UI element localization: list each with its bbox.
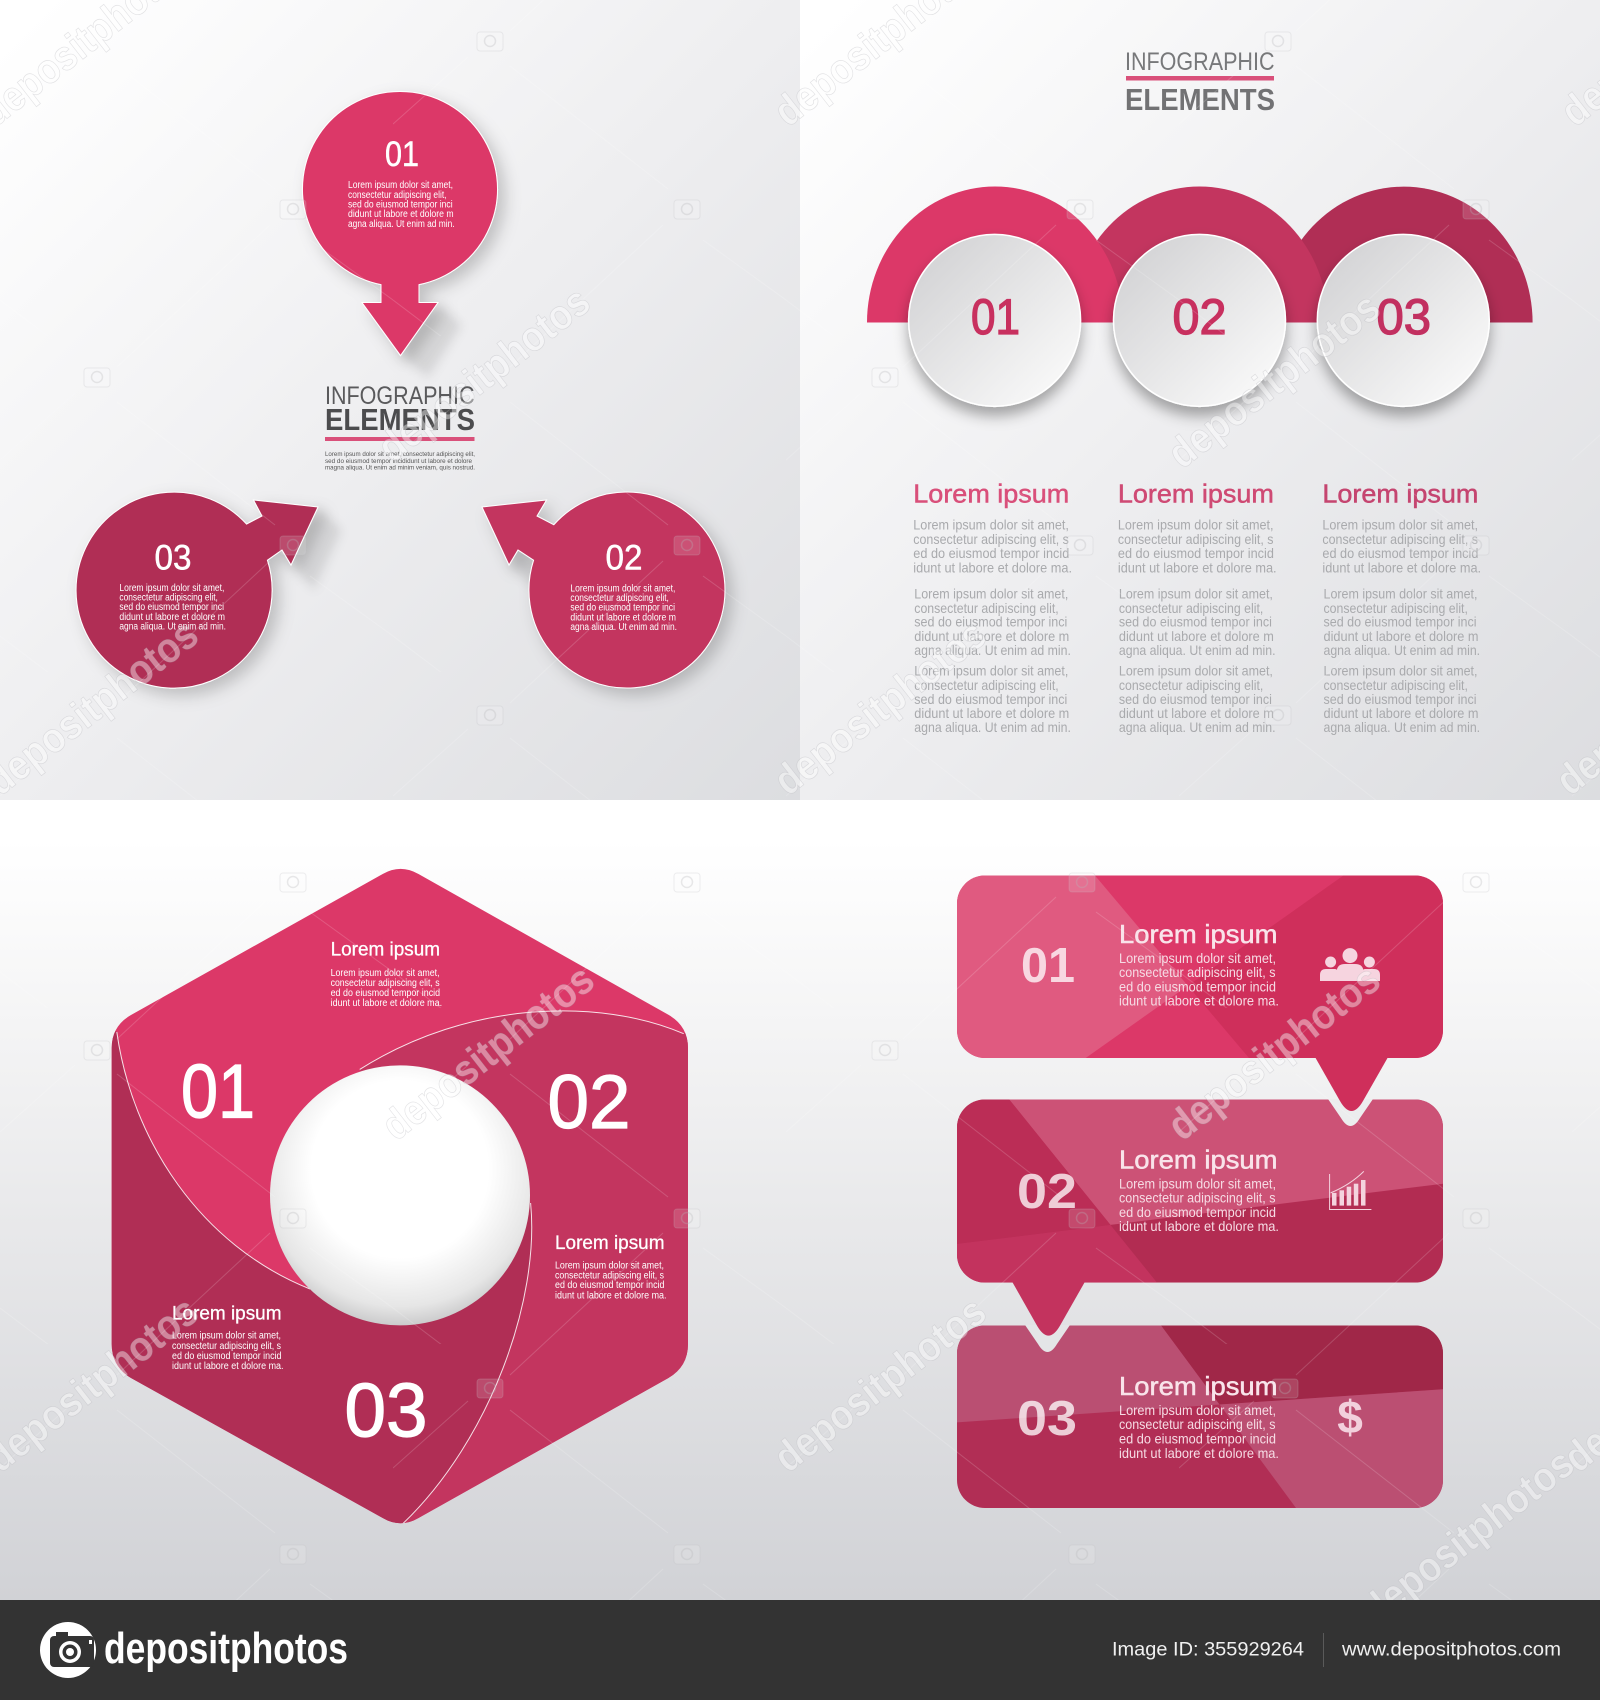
text column 2: sed do eiusmod tempor inci xyxy=(1119,691,1272,707)
heading: infographic elements (top): ELEMENTS xyxy=(1125,82,1275,117)
text column 3: Lorem ipsum dolor sit amet, xyxy=(1324,663,1478,679)
heading: infographic elements (top): INFOGRAPHIC xyxy=(1125,48,1274,76)
bubble 01: consectetur adipiscing elit, s xyxy=(1119,964,1276,980)
disc 02: 02 xyxy=(1172,289,1226,345)
disc 02 xyxy=(1114,234,1286,406)
segment 02 text xyxy=(548,1060,666,1301)
circle 03 with arrow: sed do eiusmod tempor inci xyxy=(119,602,224,613)
text column 2: consectetur adipiscing elit, s xyxy=(1118,531,1274,547)
hexagon segments xyxy=(112,868,688,1524)
text column 2: didunt ut labore et dolore m xyxy=(1119,628,1274,644)
segment 01 text: 01 xyxy=(181,1049,255,1134)
panel: speech bubbles xyxy=(800,800,1600,1600)
text column 3: agna aliqua. Ut enim ad min. xyxy=(1324,719,1480,735)
circle 01 with down arrow: didunt ut labore et dolore m xyxy=(348,209,454,220)
text column 2: didunt ut labore et dolore m xyxy=(1119,705,1274,721)
bubble 02 xyxy=(957,1058,1443,1283)
text column 1: didunt ut labore et dolore m xyxy=(914,628,1069,644)
text column 1: sed do eiusmod tempor inci xyxy=(914,614,1067,630)
circle 02 with arrow: sed do eiusmod tempor inci xyxy=(570,603,675,614)
footer logo wordmark: depositphotos xyxy=(104,1624,348,1673)
circle 01 with down arrow: sed do eiusmod tempor inci xyxy=(348,200,453,210)
text column 2: consectetur adipiscing elit, xyxy=(1119,677,1263,693)
text column 3: Lorem ipsum dolor sit amet, xyxy=(1324,586,1478,602)
icon: people xyxy=(1320,948,1380,981)
circle 03 with arrow xyxy=(76,492,318,688)
bubble 03: consectetur adipiscing elit, s xyxy=(1119,1416,1276,1432)
footer bar xyxy=(0,1600,1600,1700)
segment 03 text: consectetur adipiscing elit, s xyxy=(172,1341,281,1352)
text column 3: sed do eiusmod tempor inci xyxy=(1324,614,1476,630)
text column 3: agna aliqua. Ut enim ad min. xyxy=(1324,642,1480,658)
center sphere xyxy=(270,1065,530,1325)
bubble 02: Lorem ipsum xyxy=(1119,1144,1278,1174)
text column 1 xyxy=(913,478,1072,735)
circle 03 with arrow: 03 xyxy=(154,538,192,577)
panel: hexagon cycle xyxy=(0,800,800,1600)
text column 2: agna aliqua. Ut enim ad min. xyxy=(1119,642,1276,658)
text column 2: idunt ut labore et dolore ma. xyxy=(1118,560,1277,576)
circle 03 with arrow: agna aliqua. Ut enim ad min. xyxy=(119,622,226,632)
text column 1: agna aliqua. Ut enim ad min. xyxy=(914,642,1071,658)
text column 2: Lorem ipsum dolor sit amet, xyxy=(1119,586,1273,602)
heading: infographic elements (center): ELEMENTS xyxy=(325,402,475,437)
bubble 01: 01 xyxy=(1021,939,1075,993)
text column 1: consectetur adipiscing elit, xyxy=(914,600,1059,616)
segment 01 text: Lorem ipsum dolor sit amet, xyxy=(331,968,440,979)
circle 01 with down arrow: 01 xyxy=(385,135,419,174)
segment 02 text: ed do eiusmod tempor incid xyxy=(555,1280,664,1291)
segment 01 text: idunt ut labore et dolore ma. xyxy=(331,998,442,1009)
disc 01: 01 xyxy=(971,289,1020,345)
arch 02 xyxy=(1071,186,1328,322)
panel: arches with discs and text columns xyxy=(800,0,1600,800)
text column 1: ed do eiusmod tempor incid xyxy=(913,545,1069,561)
circle 02 with arrow: 02 xyxy=(606,538,642,577)
text column 1: consectetur adipiscing elit, s xyxy=(913,531,1069,547)
segment 01 text: Lorem ipsum xyxy=(331,940,440,961)
segment 02 text: Lorem ipsum xyxy=(555,1233,664,1254)
text column 3: consectetur adipiscing elit, s xyxy=(1322,531,1478,547)
heading: infographic elements (center): sed do eiusmod tempor incididunt ut labore et dolore xyxy=(325,458,472,465)
segment 03 text: idunt ut labore et dolore ma. xyxy=(172,1361,284,1372)
text column 1: didunt ut labore et dolore m xyxy=(914,705,1069,721)
text column 3: consectetur adipiscing elit, xyxy=(1324,677,1468,693)
segment 02 text: consectetur adipiscing elit, s xyxy=(555,1270,664,1282)
segment 01 text: ed do eiusmod tempor incid xyxy=(331,988,440,999)
disc 01 xyxy=(909,234,1081,406)
text column 2: sed do eiusmod tempor inci xyxy=(1119,614,1272,630)
arrow shadows xyxy=(291,303,538,590)
bubble 01: idunt ut labore et dolore ma. xyxy=(1119,993,1279,1009)
text column 3: Lorem ipsum xyxy=(1322,478,1478,508)
icon: bar chart xyxy=(1330,1171,1371,1210)
circle 01 with down arrow: consectetur adipiscing elit, xyxy=(348,190,446,201)
bubble 03: ed do eiusmod tempor incid xyxy=(1119,1430,1276,1446)
panel: radial arrow circles xyxy=(0,0,800,800)
image id: Image ID: 355929264 xyxy=(1112,1638,1304,1660)
text column 1: Lorem ipsum dolor sit amet, xyxy=(914,663,1068,679)
text column 3: didunt ut labore et dolore m xyxy=(1324,705,1478,721)
text column 2: ed do eiusmod tempor incid xyxy=(1118,545,1274,561)
heading: infographic elements (center) xyxy=(325,382,475,472)
segment 02 text: Lorem ipsum dolor sit amet, xyxy=(555,1260,664,1271)
watermarks: depositphotos xyxy=(765,610,994,804)
disc 03: 03 xyxy=(1376,289,1431,345)
text column 2: Lorem ipsum dolor sit amet, xyxy=(1118,517,1274,533)
bubble 01: Lorem ipsum xyxy=(1119,919,1278,949)
pointer of bubble 01 xyxy=(1315,1058,1388,1111)
bubble 03: Lorem ipsum dolor sit amet, xyxy=(1119,1402,1276,1418)
text column 3: idunt ut labore et dolore ma. xyxy=(1322,560,1481,576)
bubble 01: Lorem ipsum dolor sit amet, xyxy=(1119,950,1276,966)
text column 2: Lorem ipsum dolor sit amet, xyxy=(1119,663,1273,679)
arch 01 xyxy=(867,186,1123,322)
heading: infographic elements (center): magna aliqua. Ut enim ad minim veniam, quis nostrud. xyxy=(325,464,475,472)
arch 03 xyxy=(1275,187,1533,322)
circle 02 with arrow: consectetur adipiscing elit, xyxy=(570,593,669,604)
text column 1: idunt ut labore et dolore ma. xyxy=(913,560,1072,576)
segment 02 text: 02 xyxy=(548,1060,630,1145)
bubble 02: idunt ut labore et dolore ma. xyxy=(1119,1218,1279,1234)
text column 3 xyxy=(1322,478,1481,735)
icon: dollar sign: $ xyxy=(1337,1391,1363,1443)
heading: infographic elements (center): Lorem ipsum dolor sit amet, consectetur adipiscing elit, xyxy=(325,451,475,458)
text column 2: consectetur adipiscing elit, xyxy=(1119,600,1263,616)
circle 01 with down arrow xyxy=(302,91,498,356)
text column 3: Lorem ipsum dolor sit amet, xyxy=(1322,517,1478,533)
pointer of bubble 02 xyxy=(1012,1282,1085,1336)
bubble 02: Lorem ipsum dolor sit amet, xyxy=(1119,1175,1276,1191)
text column 2: Lorem ipsum xyxy=(1118,478,1274,508)
segment 01 text xyxy=(181,940,442,1134)
segment 03 text: Lorem ipsum xyxy=(172,1303,282,1324)
circle 02 with arrow: Lorem ipsum dolor sit amet, xyxy=(570,583,675,594)
disc 03 xyxy=(1317,234,1489,406)
segment 03 text: 03 xyxy=(344,1369,428,1454)
segment 01 text: consectetur adipiscing elit, s xyxy=(331,978,440,989)
bubble 03: Lorem ipsum xyxy=(1119,1371,1278,1401)
circle 03 with arrow: Lorem ipsum dolor sit amet, xyxy=(119,583,224,594)
segment 03 text xyxy=(172,1303,428,1454)
circle 01 with down arrow: Lorem ipsum dolor sit amet, xyxy=(348,180,453,191)
bubble 02: 02 xyxy=(1017,1165,1077,1219)
watermarks: depositphotos xyxy=(765,1287,994,1481)
text column 1: Lorem ipsum dolor sit amet, xyxy=(914,586,1068,602)
circle 02 with arrow xyxy=(482,492,725,688)
text column 3: consectetur adipiscing elit, xyxy=(1324,600,1468,616)
text column 1: consectetur adipiscing elit, xyxy=(914,677,1059,693)
circle 02 with arrow: agna aliqua. Ut enim ad min. xyxy=(570,622,677,633)
watermarks: depositphotos xyxy=(1159,283,1388,477)
text column 1: sed do eiusmod tempor inci xyxy=(914,691,1067,707)
watermarks: depositphotos xyxy=(373,955,602,1149)
notch in bubble 03 xyxy=(1025,1325,1070,1352)
bubble 02: ed do eiusmod tempor incid xyxy=(1119,1204,1276,1220)
circle 03 with arrow: consectetur adipiscing elit, xyxy=(119,592,218,603)
segment 03 text: Lorem ipsum dolor sit amet, xyxy=(172,1331,281,1342)
bubble 01 xyxy=(957,876,1443,1058)
text column 3: ed do eiusmod tempor incid xyxy=(1322,545,1478,561)
bubble 03: 03 xyxy=(1017,1392,1077,1446)
text column 1: Lorem ipsum dolor sit amet, xyxy=(913,517,1069,533)
heading: infographic elements (top) xyxy=(1125,48,1275,117)
text column 2: agna aliqua. Ut enim ad min. xyxy=(1119,719,1276,735)
segment 03 text: ed do eiusmod tempor incid xyxy=(172,1351,282,1362)
circle 03 with arrow: didunt ut labore et dolore m xyxy=(119,612,225,623)
circle 02 with arrow: didunt ut labore et dolore m xyxy=(570,612,676,623)
segment 02 text: idunt ut labore et dolore ma. xyxy=(555,1290,666,1301)
watermarks: depositphotos xyxy=(369,277,598,471)
circle 01 with down arrow: agna aliqua. Ut enim ad min. xyxy=(348,219,455,230)
text column 1: Lorem ipsum xyxy=(913,478,1069,508)
bubble 01: ed do eiusmod tempor incid xyxy=(1119,978,1276,994)
footer logo icon xyxy=(40,1622,96,1678)
website: www.depositphotos.com xyxy=(1341,1638,1561,1660)
text column 2 xyxy=(1118,478,1277,735)
heading: infographic elements (center): INFOGRAPHIC xyxy=(325,382,474,410)
text column 1: agna aliqua. Ut enim ad min. xyxy=(914,719,1071,735)
bubble 02: consectetur adipiscing elit, s xyxy=(1119,1190,1276,1206)
bubble 03 xyxy=(957,1282,1443,1508)
watermarks: depositphotos xyxy=(1159,955,1388,1149)
text column 3: sed do eiusmod tempor inci xyxy=(1324,691,1476,707)
bubble 03: idunt ut labore et dolore ma. xyxy=(1119,1445,1279,1461)
text column 3: didunt ut labore et dolore m xyxy=(1324,628,1478,644)
notch in bubble 02 xyxy=(1328,1099,1373,1126)
